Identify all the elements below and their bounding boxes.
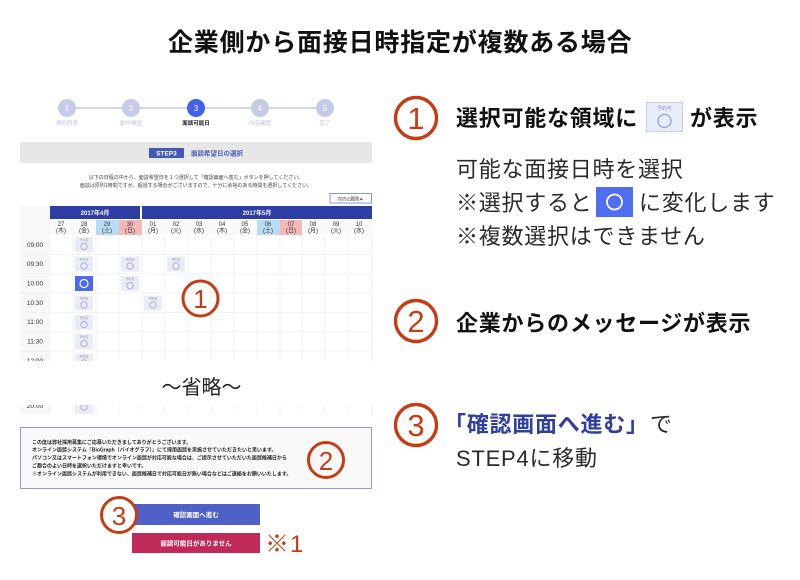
instructions: 以下の日程の中から、面談希望日を１つ選択して「確認画面へ進む」ボタンを押してください。	[89, 174, 303, 181]
confirm button	[132, 504, 260, 525]
date labels: (月)	[308, 228, 318, 234]
date labels: 27	[58, 222, 65, 228]
step heading bar: STEP3	[156, 150, 177, 158]
number badge 1: 1	[407, 101, 425, 136]
progress stepper: 動作検証	[120, 119, 142, 127]
progress stepper: 5	[323, 104, 328, 113]
icon: selected slot	[596, 187, 633, 217]
heading 1: 選択可能な領域に	[456, 106, 638, 131]
available slots: 予約可	[79, 354, 89, 358]
date labels	[56, 222, 364, 234]
body line 2 end: に変化します	[639, 190, 776, 216]
instructions: 面談は原則1時間ですが、超過する場合がございますので、十分に余裕のある時間を選択してください。	[80, 182, 312, 189]
date labels: 07	[288, 222, 295, 228]
available slots	[75, 237, 185, 414]
company message box: ご都合のよい日時を選択いただけますと幸いです。	[32, 462, 146, 470]
note marker: ※1	[265, 531, 304, 558]
heading 2: 企業からのメッセージが表示	[456, 311, 751, 336]
heading 3: 「確認画面へ進む」	[444, 412, 649, 437]
available slots: 予約可	[125, 256, 135, 262]
available slots: 予約可	[171, 256, 181, 262]
date labels: (土)	[263, 226, 273, 234]
omission band: ～省略～	[162, 376, 242, 399]
date labels: 02	[173, 222, 180, 228]
date labels: (火)	[171, 228, 181, 234]
date labels: 08	[310, 222, 317, 228]
time labels	[27, 242, 44, 410]
progress stepper: 規約同意	[56, 119, 78, 127]
heading 3 suffix: で	[650, 412, 673, 437]
date labels: 10	[356, 222, 363, 228]
marker 3 on button: 3	[112, 501, 126, 531]
date labels: (金)	[240, 226, 250, 234]
available slots: 予約可	[125, 276, 135, 281]
available slots: 予約可	[79, 334, 89, 339]
icon: available slot	[646, 102, 682, 132]
time labels: 11:00	[27, 319, 43, 326]
date labels: 03	[196, 222, 203, 228]
schedule table	[20, 206, 372, 414]
date labels: (火)	[331, 228, 341, 234]
progress stepper: 完了	[319, 120, 331, 127]
number badge 2: 2	[407, 304, 425, 339]
time labels: 09:00	[27, 242, 44, 249]
progress stepper: 4	[258, 104, 263, 113]
panel: screenshot of step 3 form	[0, 99, 400, 558]
month header: April	[50, 206, 140, 219]
date labels: (日)	[286, 228, 296, 234]
month header: May: 2017年5月	[243, 209, 271, 217]
available slots: 予約可	[79, 256, 89, 262]
panel: explanation 3	[396, 404, 673, 471]
month header: April: 2017年4月	[81, 209, 109, 217]
company message box: この度は弊社採用募集にご応募いただきましてありがとうございます。	[32, 439, 191, 446]
available slots: 予約可	[148, 296, 158, 300]
no available date button	[132, 533, 260, 553]
panel: explanation 1	[396, 98, 776, 249]
time labels: 09:30	[27, 261, 44, 268]
company message box: オンライン面談システム『BioGraph（バイオグラフ）』にて採用面談を実施させていただきたいと思います。	[32, 447, 277, 454]
date labels: (水)	[194, 226, 204, 234]
month header: May	[142, 206, 372, 219]
date labels: (木)	[217, 226, 227, 234]
date labels: 29	[104, 222, 111, 228]
time labels: 10:00	[27, 280, 44, 288]
time labels: 12:00	[27, 358, 44, 365]
number badge 2	[396, 300, 436, 342]
company message box	[20, 428, 372, 488]
company message box: パソコン又はスマートフォン環境でオンライン面談が対応可能な場合は、ご提示させていただいた面談候補日から	[32, 455, 287, 462]
omission band	[0, 361, 400, 405]
time labels: 20:00	[27, 403, 44, 410]
next two weeks button	[330, 194, 372, 203]
time labels: 11:30	[27, 338, 43, 346]
date labels: 09	[333, 222, 340, 228]
available slots: 予約可	[79, 315, 89, 320]
date labels: 28	[81, 222, 88, 228]
date labels: (日)	[125, 228, 135, 234]
time labels: 10:30	[27, 300, 44, 307]
date labels: 05	[242, 222, 249, 228]
date labels: (金)	[79, 226, 89, 234]
no available date button: 面談可能日がありません	[160, 538, 232, 548]
number badge 3: 3	[407, 408, 425, 443]
step heading bar: 面談希望日の選択	[191, 148, 244, 158]
title: 企業側から面接日時指定が複数ある場合	[168, 28, 632, 57]
progress stepper: 1	[65, 104, 70, 113]
available slots: 予約可	[79, 296, 89, 300]
body line 3: ※複数選択はできません	[456, 224, 706, 249]
date labels: (月)	[148, 228, 158, 234]
panel: explanation 2	[396, 300, 751, 342]
progress stepper: 面談可能日	[182, 119, 210, 127]
instructions	[80, 174, 312, 189]
body text 3: STEP4に移動	[456, 446, 598, 471]
next two weeks button: 次の2週間 ▸	[337, 196, 363, 202]
heading 1 continued: が表示	[690, 106, 758, 131]
icon: available slot: 予約可	[657, 105, 672, 112]
progress stepper: 内容確認	[249, 119, 271, 127]
date labels: 06	[265, 222, 272, 228]
company message box: ※オンライン面談システムが利用できない、面談候補日で対応可能日が無い場合などはご連絡をお願いいたします。	[32, 470, 291, 478]
body line 1: 可能な面接日時を選択	[456, 157, 684, 182]
progress stepper: 3	[194, 104, 199, 113]
progress stepper	[56, 99, 334, 127]
step heading bar	[20, 142, 372, 163]
marker 2 on message box	[308, 442, 344, 478]
marker 1 on table	[183, 281, 218, 316]
confirm button: 確認画面へ進む	[173, 510, 219, 519]
marker 1 on table: 1	[193, 284, 208, 314]
date labels: (水)	[354, 226, 364, 234]
date labels: (土)	[102, 226, 112, 234]
date labels: 01	[150, 222, 157, 228]
number badge 3	[396, 404, 436, 446]
selected slot	[75, 276, 93, 291]
date labels: 04	[219, 222, 226, 228]
progress stepper: 2	[129, 104, 134, 113]
body line 2 start: ※選択すると	[456, 190, 593, 216]
available slots: 予約可	[79, 237, 89, 242]
date labels: (木)	[56, 226, 66, 234]
marker 3 on button	[102, 498, 136, 532]
number badge 1	[396, 98, 436, 138]
date labels: 30	[127, 222, 134, 228]
marker 2 on message box: 2	[319, 446, 333, 476]
